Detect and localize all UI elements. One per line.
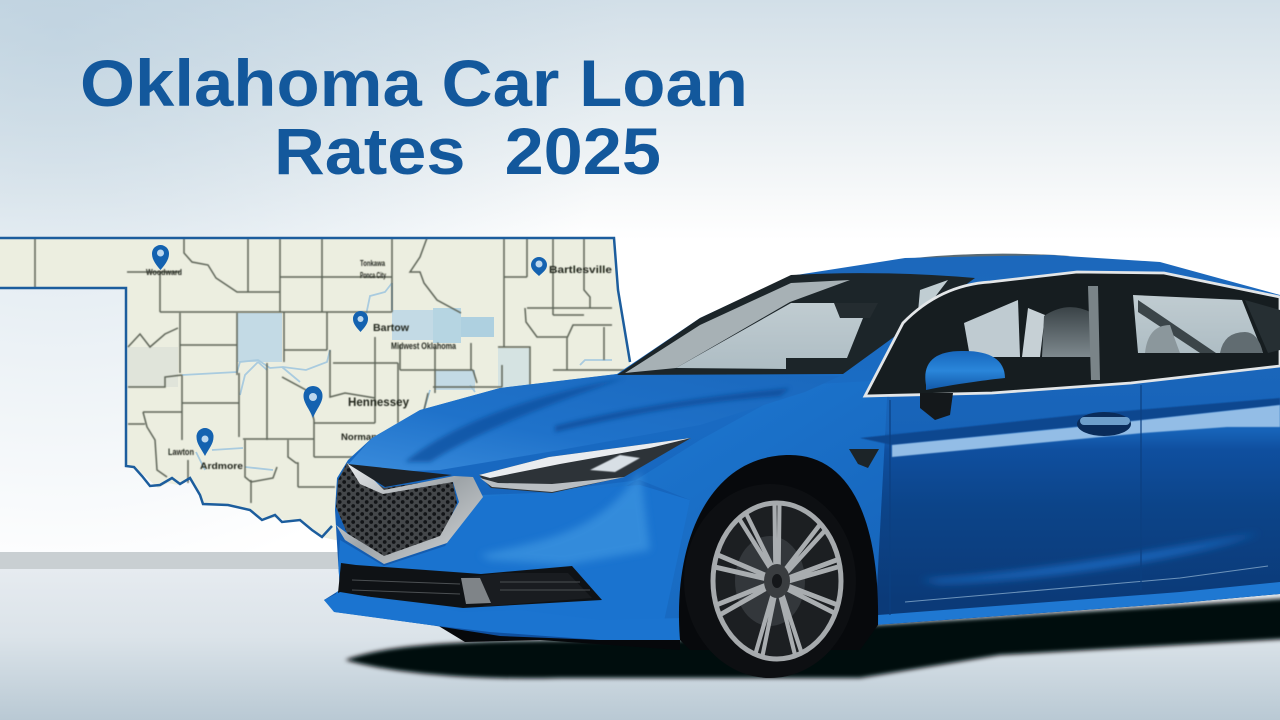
side door panel	[877, 372, 1280, 625]
background sky	[0, 0, 1280, 552]
city labels: Bartlesville	[549, 265, 613, 276]
roof shade	[905, 254, 1070, 264]
title	[80, 46, 748, 188]
side window frame	[865, 272, 1280, 396]
city labels: Woodward	[146, 268, 182, 277]
underbody	[430, 618, 680, 650]
hood	[345, 374, 840, 472]
city labels: Norman	[341, 432, 377, 442]
city labels: Hennessey	[348, 395, 409, 409]
county lines	[35, 238, 625, 503]
pin: center	[353, 311, 368, 332]
door seams	[890, 385, 1141, 615]
front fender	[482, 425, 880, 618]
pin: southwest	[196, 428, 214, 456]
hub	[764, 564, 790, 598]
lower door highlight	[920, 533, 1260, 583]
lower intake	[338, 563, 602, 608]
city labels: Lawton	[168, 447, 194, 457]
floor band	[0, 552, 345, 570]
rim	[713, 503, 841, 659]
city labels	[146, 259, 613, 471]
city labels: Tonkawa	[360, 259, 385, 268]
city labels: Midwest Oklahoma	[391, 341, 457, 351]
ground shadow	[345, 595, 1280, 678]
bumper highlight	[480, 470, 650, 565]
bumper	[335, 485, 690, 640]
shoulder dark channel	[860, 398, 1280, 445]
pin: northwest	[152, 245, 169, 270]
title: Oklahoma Car Loan	[80, 46, 748, 120]
hood crease lower	[555, 388, 790, 432]
state shape	[0, 238, 640, 540]
pin: northeast	[531, 257, 547, 276]
side windows	[964, 286, 1280, 380]
state border	[0, 238, 630, 362]
wheel	[684, 484, 856, 678]
title: Rates 2025	[274, 114, 661, 188]
windshield	[617, 273, 975, 375]
spokes	[715, 505, 839, 657]
door handle	[1077, 412, 1131, 436]
grille chrome	[336, 463, 483, 564]
panhandle and south border	[0, 288, 332, 537]
rivers	[182, 283, 612, 470]
floor	[0, 569, 1280, 720]
mirror	[920, 351, 1005, 420]
city labels: Ponca City	[360, 271, 386, 280]
body shell	[324, 255, 1280, 640]
city labels: Ardmore	[200, 461, 243, 471]
fuel vent	[849, 449, 879, 468]
wheel arch	[679, 455, 878, 650]
sill	[875, 582, 1280, 625]
grille	[336, 463, 483, 564]
city labels: Bartow	[373, 323, 409, 334]
front lip	[324, 592, 685, 640]
hood crease upper	[405, 378, 625, 462]
grille top recess	[348, 464, 452, 487]
sill line	[905, 566, 1268, 602]
headlight	[479, 438, 691, 493]
pin: central south	[303, 386, 323, 418]
shoulder highlight	[892, 405, 1280, 457]
water and shaded counties	[128, 308, 530, 390]
car	[324, 254, 1280, 678]
map: Oklahoma counties	[0, 238, 640, 540]
